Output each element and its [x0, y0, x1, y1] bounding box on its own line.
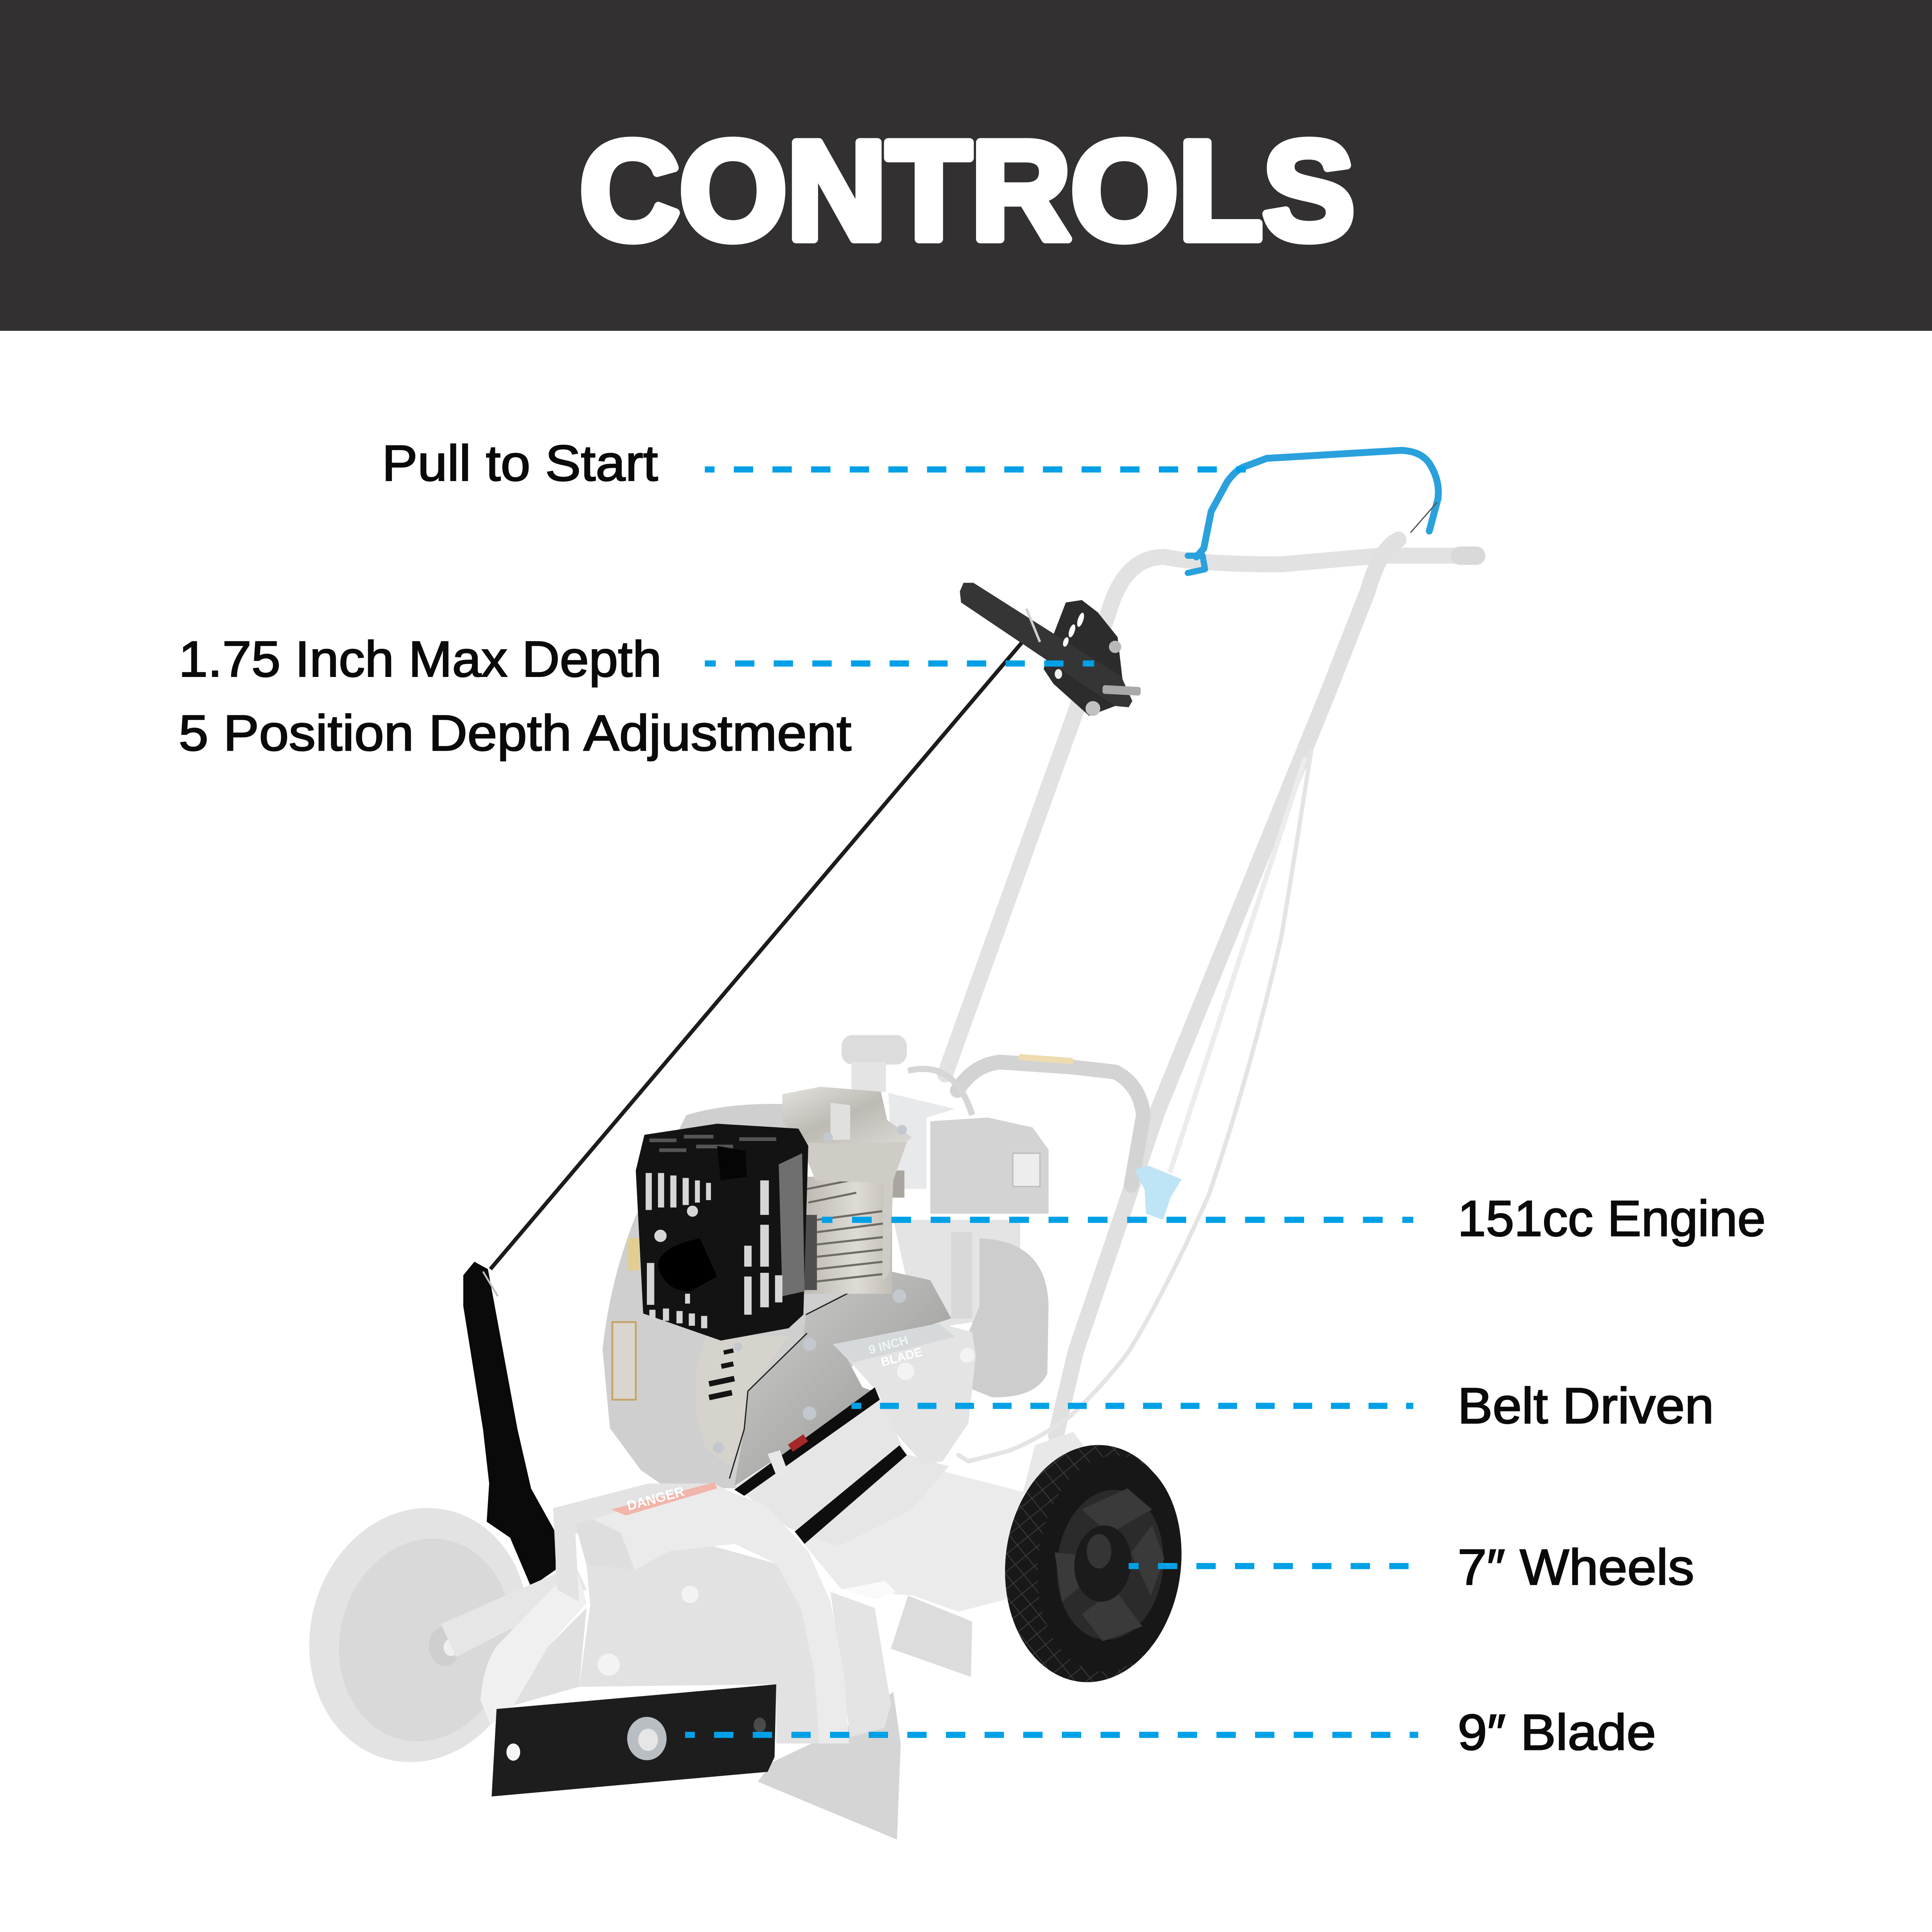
callout line: depth [705, 663, 1094, 665]
cylinder with fins [803, 1170, 905, 1294]
ghost left wheel [283, 1485, 555, 1786]
foil heat shield [775, 1150, 806, 1294]
blade bolt [627, 1717, 667, 1760]
depth adjustment bracket [960, 583, 1141, 716]
valve cover [782, 1087, 912, 1143]
ghost wheel bracket [1023, 1432, 1083, 1493]
ghost engine shroud [602, 1104, 862, 1488]
lever pin [483, 1272, 498, 1296]
callout line: blade [685, 1734, 1418, 1736]
ghost rear plate [891, 1595, 972, 1677]
label: blade: 9″ Blade [1458, 1704, 1656, 1760]
wheel [993, 1436, 1192, 1691]
ghost lower engine [735, 1392, 949, 1546]
ghost shield wing [481, 1565, 587, 1725]
label: max depth: 1.75 Inch Max Depth [179, 631, 662, 687]
ghost pulley cover: BLADE [879, 1345, 924, 1369]
callout line: pull to start [705, 468, 1246, 470]
callout line: wheels [1129, 1565, 1413, 1567]
ghost handle frame and tubes [945, 540, 1476, 1461]
label: depth adjustment: 5 Position Depth Adjustment [179, 705, 851, 761]
engine head [800, 1142, 907, 1281]
callout line: engine [822, 1219, 1413, 1221]
blower vents [709, 1349, 735, 1400]
ghost oil cap and tank [842, 1035, 1049, 1397]
label: belt: Belt Driven [1458, 1378, 1714, 1434]
engine bolts [713, 1125, 907, 1453]
ghost wing interior [514, 1608, 587, 1705]
label: engine: 151cc Engine [1458, 1190, 1766, 1247]
ghost shield: DANGER [625, 1484, 686, 1514]
ghost deck strip [842, 1581, 896, 1599]
blade [492, 1684, 776, 1796]
label: pull to start: Pull to Start [382, 435, 658, 492]
engine [636, 1087, 951, 1486]
muffler outlet knob [658, 1238, 717, 1291]
ghost shield [553, 1482, 849, 1743]
ghost pulley cover: 9 INCH [867, 1333, 910, 1357]
ghost deck [801, 1471, 1024, 1612]
ghost side plate [830, 1592, 891, 1737]
valve cover bracket [830, 1103, 850, 1140]
ghost shroud stickers [612, 1238, 639, 1400]
ghost blue clip [1135, 1166, 1182, 1220]
pull to start handle [1188, 450, 1438, 573]
ghost pulley cover [833, 1323, 976, 1464]
depth lever [463, 1262, 556, 1587]
depth adjustment rod [490, 636, 1027, 1269]
belts [735, 1388, 907, 1544]
title: CONTROLS [580, 112, 1355, 269]
header band [0, 0, 1932, 331]
danger sticker [611, 1482, 717, 1515]
blower housing [696, 1336, 790, 1466]
ghost scraper plate [758, 1692, 901, 1840]
muffler cover block [717, 1146, 747, 1180]
machine illustration [283, 450, 1476, 1840]
ghost axle arm [441, 1565, 587, 1657]
belt marking [788, 1434, 808, 1452]
callout line: belt [851, 1405, 1413, 1407]
crankcase seam [730, 1274, 886, 1479]
ghost wheel nut [768, 1450, 789, 1479]
muffler cage [636, 1124, 808, 1340]
label: wheels: 7″ Wheels [1458, 1539, 1694, 1595]
silver crankcase plate [735, 1270, 951, 1486]
